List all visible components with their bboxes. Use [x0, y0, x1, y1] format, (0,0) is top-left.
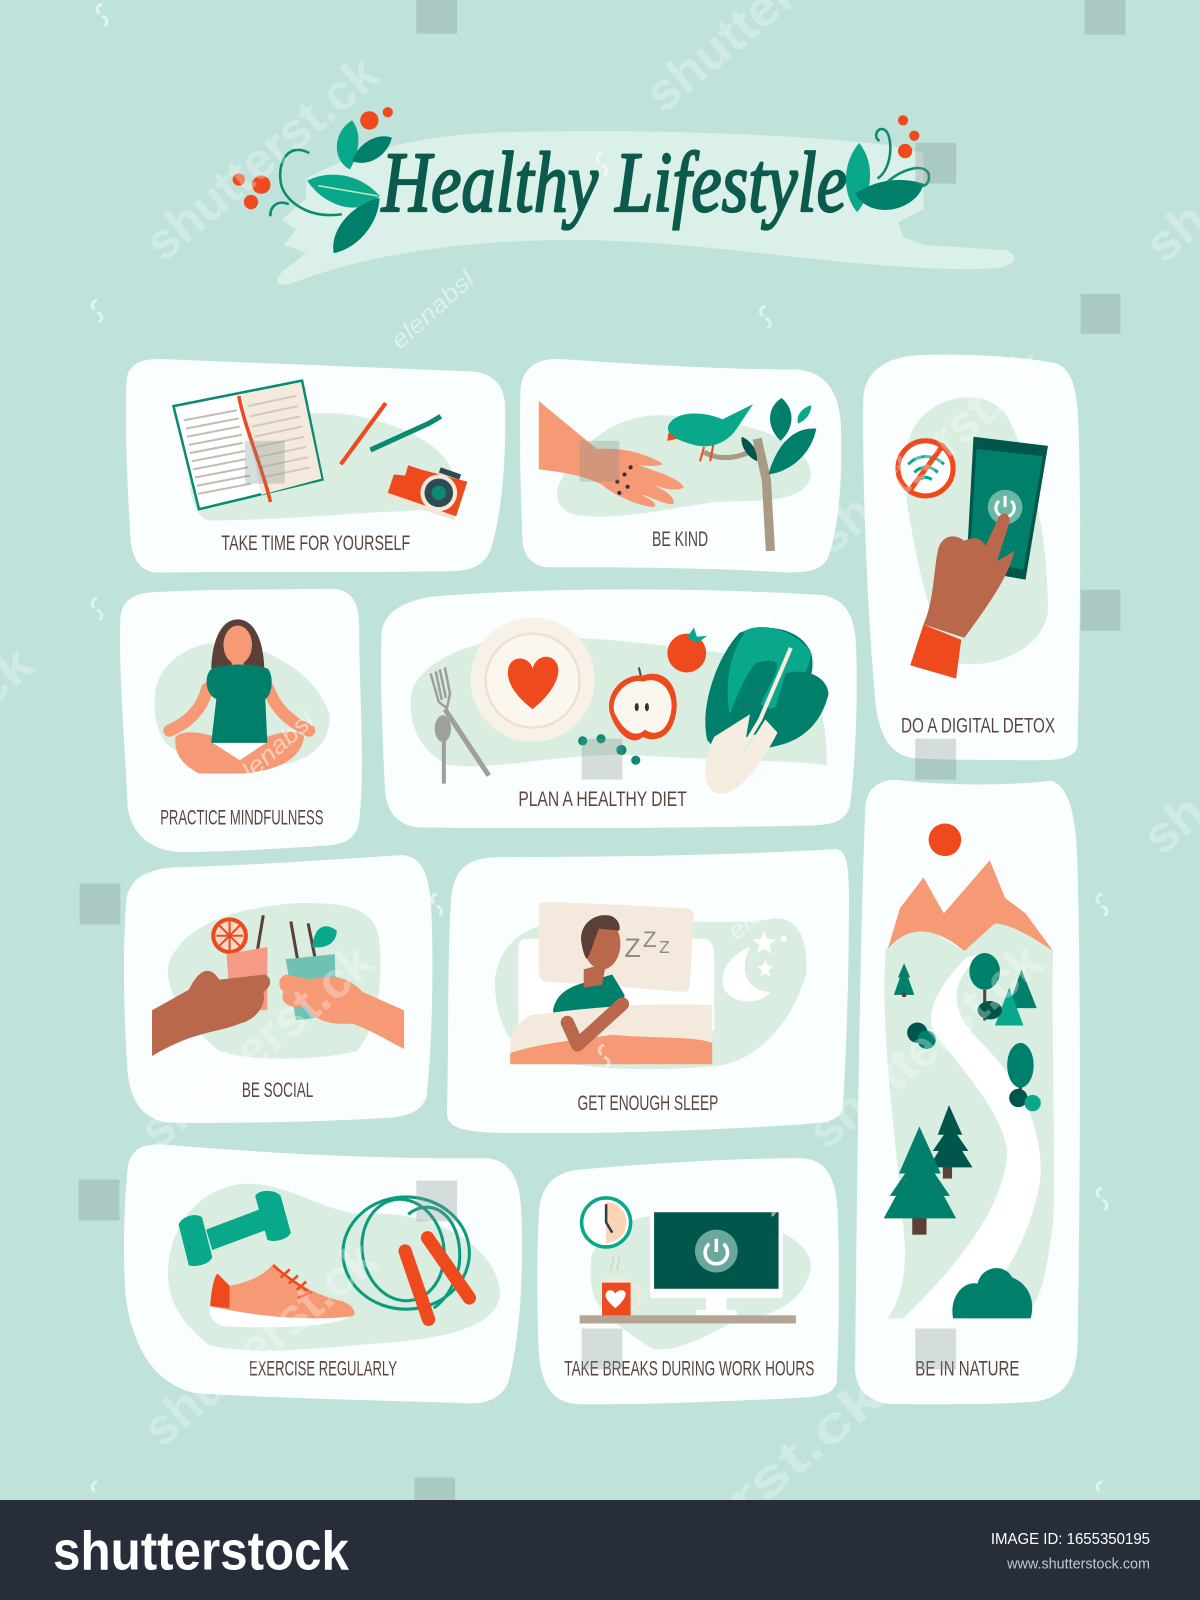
watermarks: elenabsl — [723, 857, 817, 945]
left floral ornament — [233, 107, 393, 253]
watermarks: elenabsl — [226, 707, 320, 795]
blob — [590, 1214, 811, 1349]
icon: pencil — [341, 403, 386, 464]
caption: BE KIND — [652, 527, 708, 551]
blob — [168, 1184, 500, 1351]
icon: light hand — [279, 974, 404, 1049]
title banner — [233, 107, 1015, 285]
icon: zzz: Z — [624, 933, 641, 963]
watermarks: shutterst.ck — [802, 337, 1058, 565]
card — [126, 359, 505, 572]
icon: tree branch — [704, 398, 816, 551]
brush stroke — [277, 131, 1015, 285]
caption: PLAN A HEALTHY DIET — [518, 787, 687, 811]
panel: take breaks during work hours — [537, 1158, 839, 1404]
panel: be kind — [520, 359, 841, 572]
icon: zzz: Z — [643, 927, 657, 952]
blob — [905, 397, 1048, 664]
blob — [154, 643, 330, 767]
icon: computer monitor — [650, 1204, 783, 1315]
blob — [168, 903, 380, 1059]
icon: sleeping man — [553, 915, 624, 1031]
shutterstock logo: shutterstock — [53, 1519, 349, 1581]
blanket — [510, 1004, 712, 1064]
card — [381, 589, 857, 828]
icon: pen — [370, 416, 441, 450]
image id: IMAGE ID: 1655350195 — [991, 1531, 1150, 1548]
icon: teal drink — [286, 921, 337, 1020]
card — [520, 359, 841, 572]
caption: EXERCISE REGULARLY — [249, 1357, 397, 1381]
bed — [518, 902, 714, 1031]
icon: smartphone — [966, 437, 1048, 580]
icon: sneaker — [210, 1263, 355, 1327]
blob — [495, 917, 806, 1069]
panel: exercise regularly — [124, 1144, 522, 1403]
icon: no wifi sign — [898, 441, 953, 496]
card — [447, 849, 849, 1133]
icon: spoon — [435, 715, 451, 784]
watermarks: rst.ck — [715, 1367, 893, 1529]
bush: large — [952, 1268, 1032, 1318]
caption: GET ENOUGH SLEEP — [578, 1091, 718, 1115]
icon: brown hand — [152, 971, 270, 1056]
watermark small marks — [92, 4, 1107, 1491]
icon: tomato — [667, 628, 707, 672]
panel: plan a healthy diet — [381, 589, 857, 828]
icon: bok choy — [705, 627, 829, 794]
caption: TAKE BREAKS DURING WORK HOURS — [564, 1357, 814, 1381]
card — [855, 780, 1080, 1404]
caption: TAKE TIME FOR YOURSELF — [221, 531, 410, 555]
shelf — [580, 1315, 796, 1323]
icon: sun — [929, 823, 961, 856]
card — [537, 1158, 839, 1404]
caption: DO A DIGITAL DETOX — [901, 714, 1055, 738]
watermarks: shutterst.ck — [797, 932, 1053, 1159]
panel: practice mindfulness — [120, 589, 362, 852]
panel: get enough sleep — [447, 849, 849, 1133]
icon: zzz — [624, 927, 670, 963]
icon: man's arm — [567, 1004, 622, 1045]
right floral ornament — [846, 115, 929, 212]
icon: peas — [578, 734, 640, 765]
panel: do a digital detox — [863, 355, 1080, 760]
panel: be in nature — [855, 780, 1080, 1404]
card — [124, 855, 432, 1123]
icon: zzz: Z — [659, 937, 670, 957]
card — [120, 589, 362, 852]
icon: plate with heart — [470, 617, 595, 742]
icon: jump rope — [343, 1193, 469, 1309]
tree: round — [1007, 1043, 1041, 1111]
card — [124, 1144, 522, 1403]
panel: be social — [124, 855, 432, 1123]
title: Healthy Lifestyle — [381, 135, 847, 230]
tree: large pine — [884, 1127, 956, 1235]
watermarks: shutterst.ck — [134, 44, 390, 272]
caption: BE IN NATURE — [915, 1357, 1019, 1381]
icon: bird — [667, 404, 753, 461]
icon: hand with seeds — [539, 401, 684, 507]
card — [863, 355, 1080, 760]
blob — [189, 413, 454, 520]
watermarks: shutterst.ck — [132, 1230, 388, 1457]
caption: PRACTICE MINDFULNESS — [160, 805, 323, 829]
footer bar — [0, 1500, 1200, 1600]
icon: pink drink — [211, 915, 267, 1010]
icon: rope handles — [405, 1238, 469, 1319]
blob — [557, 415, 811, 517]
bush — [907, 1022, 936, 1049]
icon: meditating woman — [169, 619, 309, 773]
tree: dark pine — [929, 1105, 972, 1179]
icon: fork — [431, 667, 489, 776]
caption: BE SOCIAL — [242, 1078, 313, 1102]
icon: apple — [609, 667, 677, 740]
site url: www.shutterstock.com — [1006, 1556, 1150, 1572]
road — [903, 954, 1041, 1318]
watermarks: elenabsl — [386, 266, 480, 354]
blob — [411, 637, 827, 766]
icon: book — [173, 381, 322, 509]
watermarks: shutterst.ck — [129, 932, 385, 1159]
tree: small pine — [894, 963, 914, 997]
tree group — [969, 953, 1037, 1026]
valley — [884, 923, 1054, 1318]
icon: hand pressing — [910, 514, 1014, 679]
panel: take time for yourself — [126, 359, 505, 572]
mountains — [888, 860, 1053, 951]
icon: coffee mug — [602, 1257, 640, 1316]
icon: camera — [386, 465, 467, 520]
icon: moon and stars — [722, 931, 787, 1002]
icon: dumbbell — [179, 1191, 291, 1266]
icon: clock — [582, 1198, 631, 1247]
